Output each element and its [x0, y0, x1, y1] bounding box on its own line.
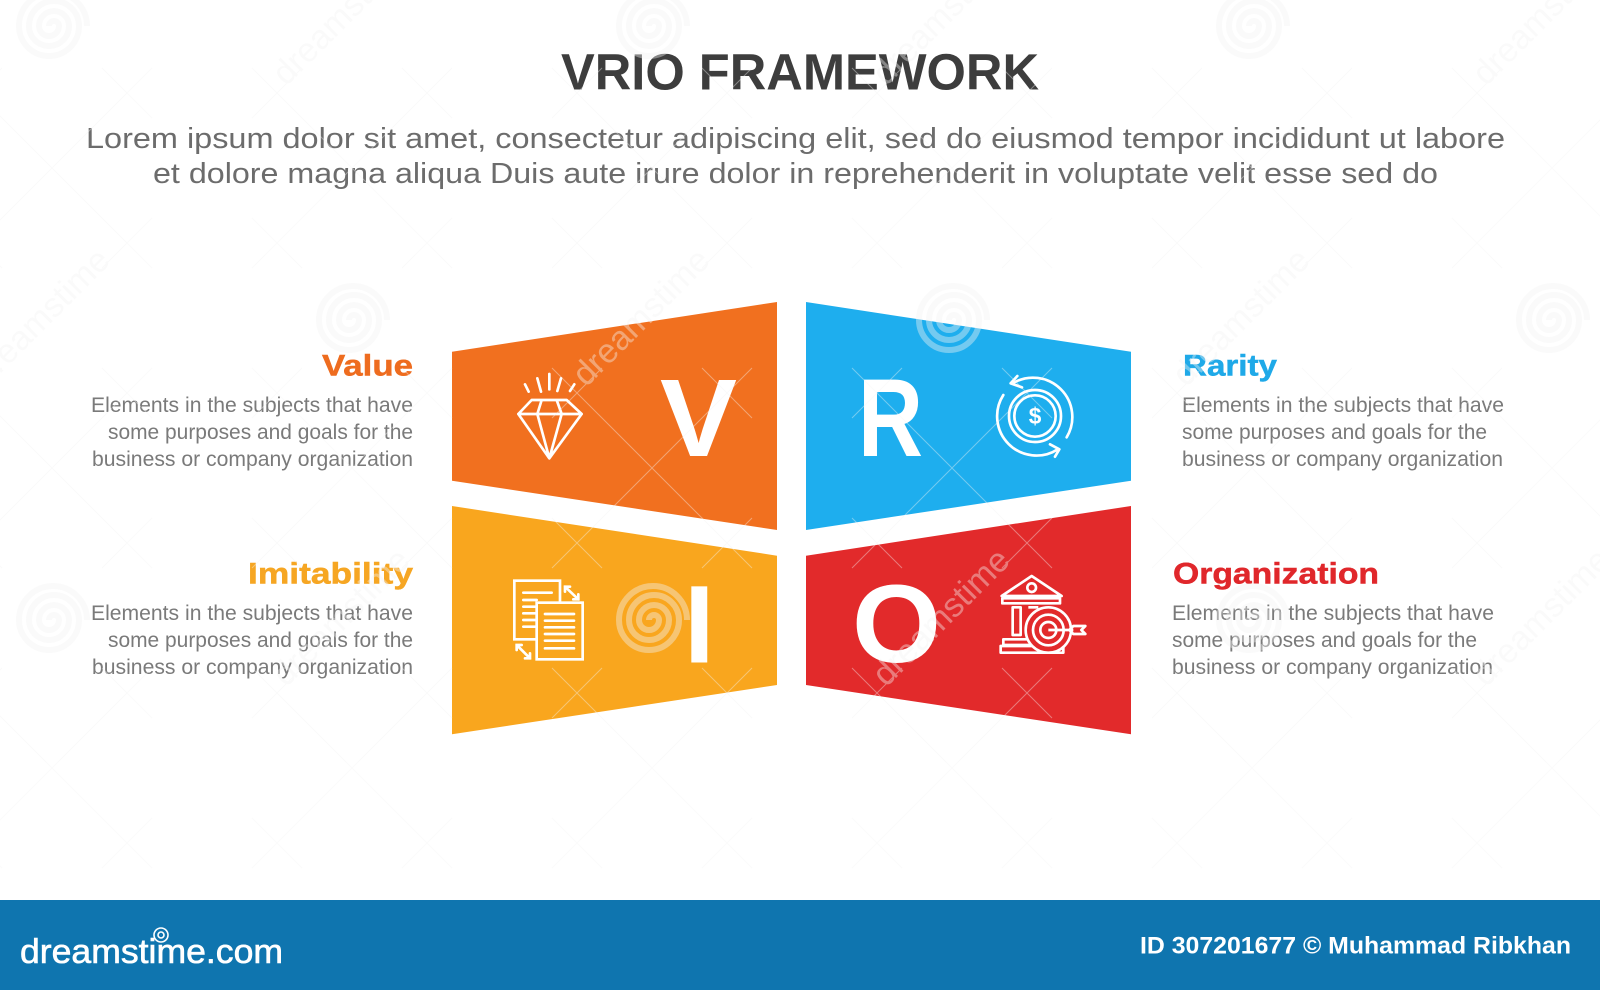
panel: imitability text: business or company organization [92, 655, 413, 679]
panel: organization text: Organization [1173, 558, 1379, 590]
panel: imitability text: Imitability [248, 558, 413, 590]
footer band [0, 900, 1600, 990]
panel: rarity text: business or company organization [1182, 447, 1503, 471]
panel: imitability text: Elements in the subjects that have [91, 601, 413, 625]
panel: value text: Elements in the subjects that have [91, 393, 413, 417]
panel: rarity text: Elements in the subjects that have [1182, 393, 1504, 417]
panel: organization text [1172, 558, 1494, 679]
watermark overlay: dreamstime [565, 241, 717, 393]
panel: imitability text: some purposes and goals for the [108, 628, 413, 652]
icon: diamond [518, 374, 582, 458]
watermark overlay: dreamstime [1165, 241, 1317, 393]
panel: O block: O [852, 563, 941, 686]
footer credit: ID 307201677 © Muhammad Ribkhan [1140, 932, 1571, 960]
panel: imitability text [91, 558, 413, 679]
panel: I block: I [684, 564, 715, 687]
panel: V block: V [660, 357, 737, 480]
panel: R block: R [858, 357, 923, 480]
subtitle text block: et dolore magna aliqua Duis aute irure dolor in reprehenderit in voluptate velit esse sed do [153, 158, 1438, 190]
panel: value text: business or company organization [92, 447, 413, 471]
panel: organization text: business or company organization [1172, 655, 1493, 679]
watermark overlay: dreamstime [865, 541, 1017, 693]
footer logo: dreamstime.com [20, 933, 283, 971]
panel: rarity text: Rarity [1183, 350, 1277, 382]
panel: rarity text [1182, 350, 1504, 471]
watermark overlay: dreamstime [265, 541, 417, 693]
icon: bank with target [1001, 576, 1085, 653]
panel: value text [91, 350, 413, 471]
subtitle text block [86, 123, 1505, 190]
subtitle text block: Lorem ipsum dolor sit amet, consectetur adipiscing elit, sed do eiusmod tempor incididunt ut labore [86, 123, 1505, 155]
panel: organization text: some purposes and goals for the [1172, 628, 1477, 652]
panel: V block [452, 302, 777, 530]
panel: rarity text: some purposes and goals for the [1182, 420, 1487, 444]
icon: documents [514, 581, 583, 659]
panel: R block [806, 302, 1131, 530]
icon: rotating dollar coin: $ [1029, 403, 1042, 429]
title: VRIO FRAMEWORK [561, 44, 1039, 100]
panel: I block [452, 506, 777, 734]
icon: rotating dollar coin [997, 376, 1072, 457]
panel: value text: Value [322, 350, 413, 382]
panel: O block [806, 506, 1131, 734]
panel: organization text: Elements in the subjects that have [1172, 601, 1494, 625]
panel: value text: some purposes and goals for the [108, 420, 413, 444]
